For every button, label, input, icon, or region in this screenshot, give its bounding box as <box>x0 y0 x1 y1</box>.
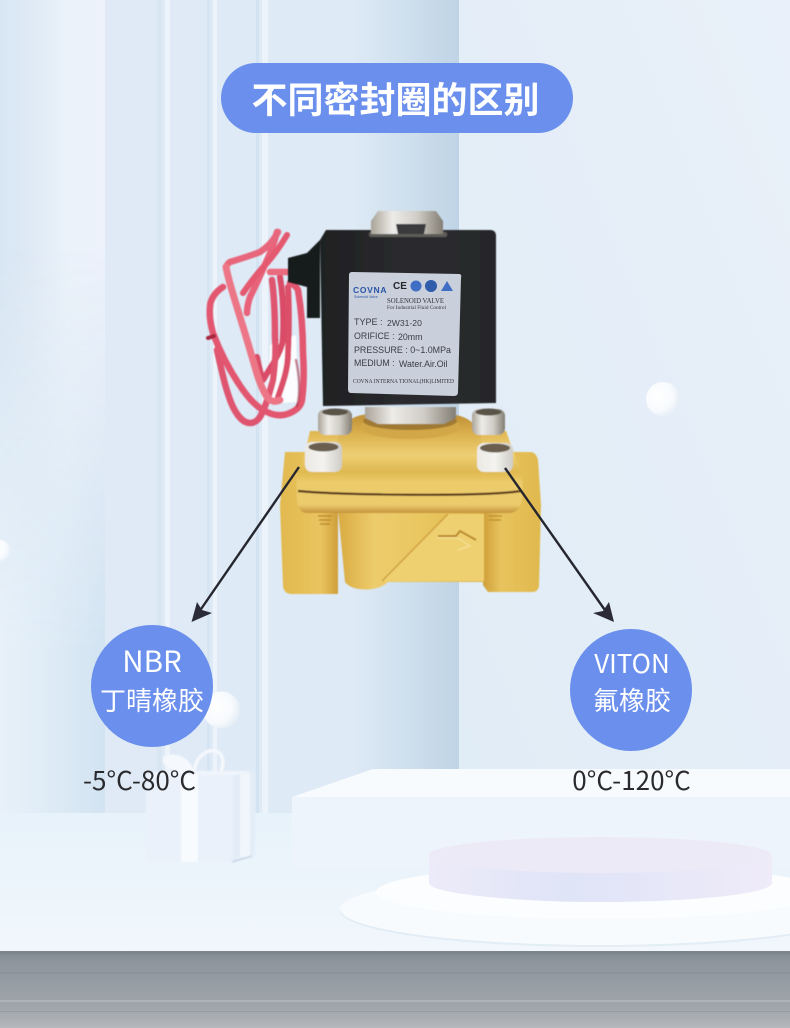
nameplate: 2W31-20 <box>387 318 422 328</box>
title pill <box>221 63 573 133</box>
nameplate: 20mm <box>398 332 422 342</box>
nut on top <box>369 232 447 237</box>
badge: NBR <box>91 625 213 747</box>
nameplate: MEDIUM : <box>354 358 395 368</box>
badge: VITON: 氟橡胶 <box>593 681 671 718</box>
temperature: NBR: -5°C-80°C <box>83 761 196 798</box>
gift box <box>146 751 255 862</box>
solenoid valve <box>208 211 541 594</box>
nameplate: For Industrial Fluid Control <box>387 305 447 311</box>
nameplate <box>348 272 461 396</box>
hex nut <box>365 407 456 424</box>
nameplate: SOLENOID VALVE <box>387 298 444 305</box>
nameplate: PRESSURE : 0~1.0MPa <box>354 345 451 355</box>
connector <box>288 240 320 318</box>
flange <box>296 431 523 513</box>
nameplate: TYPE : <box>354 317 383 327</box>
dome <box>337 414 482 473</box>
badge: VITON: VITON <box>594 644 670 681</box>
nameplate: COVNA INTERNA TIONAL(HK)LIMITED <box>353 378 454 385</box>
nameplate: CE <box>393 281 407 292</box>
temperature: VITON: 0°C-120°C <box>572 761 691 798</box>
arrow: to VITON <box>505 468 614 622</box>
badge: VITON <box>570 629 692 751</box>
valve body <box>280 452 338 594</box>
coil <box>320 230 496 406</box>
platform <box>292 769 790 866</box>
decorative spheres <box>0 382 680 728</box>
title pill: 不同密封圈的区别 <box>251 72 540 124</box>
nameplate: ORIFICE : <box>354 331 395 341</box>
rear bolts <box>318 409 352 435</box>
front bolts <box>305 442 342 472</box>
badge: NBR: 丁晴橡胶 <box>100 681 204 718</box>
round podium <box>340 837 790 947</box>
nameplate: Solenoid Valve <box>354 295 378 299</box>
wires <box>208 232 304 423</box>
nameplate: COVNA <box>353 285 387 295</box>
nameplate: Water.Air.Oil <box>399 359 448 369</box>
arrow: to NBR <box>192 467 299 622</box>
white gap behind wire loop <box>268 335 298 404</box>
badge: NBR: NBR <box>122 639 182 681</box>
